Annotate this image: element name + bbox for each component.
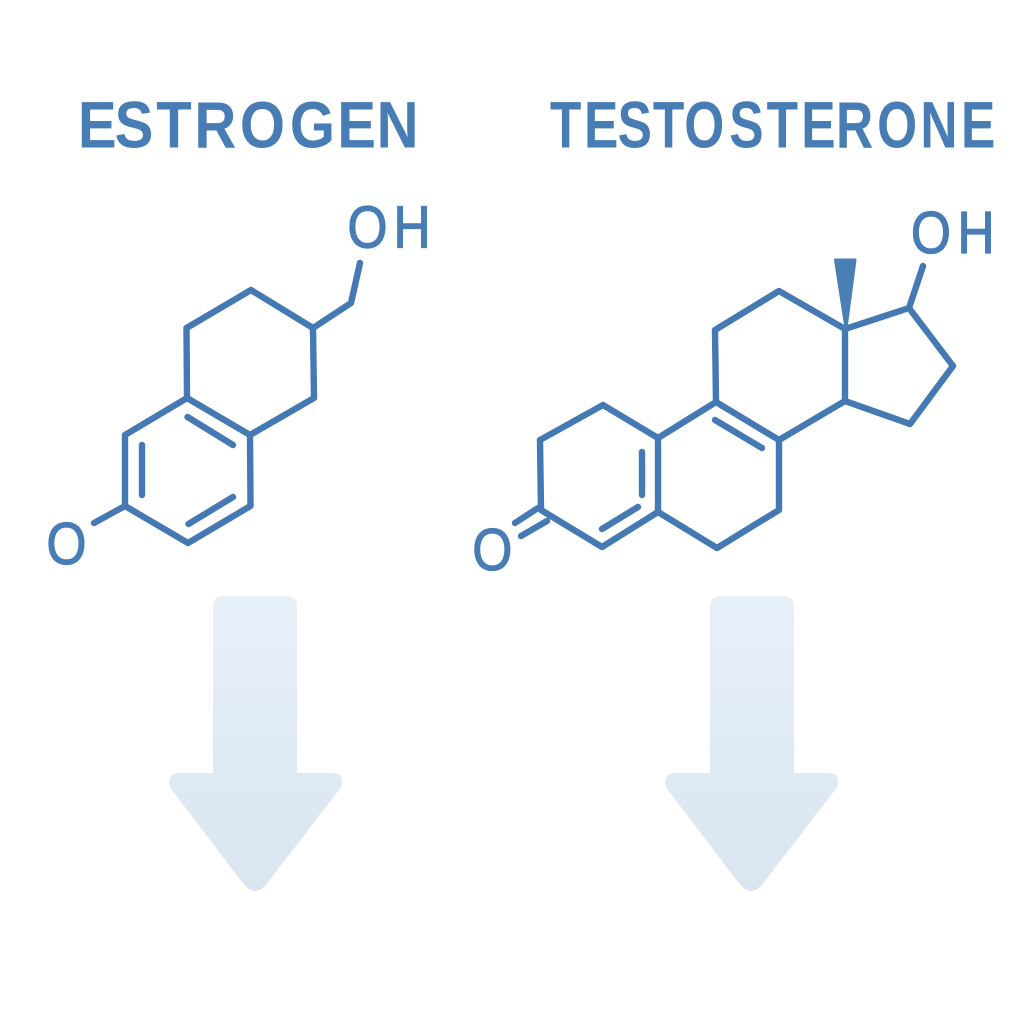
arrow: estrogen down bbox=[169, 596, 342, 891]
label: testosterone OH: OH bbox=[911, 200, 995, 266]
label: estrogen OH: OH bbox=[347, 194, 431, 260]
label: estrogen O: O bbox=[46, 511, 86, 577]
arrow: testosterone down bbox=[665, 596, 838, 891]
title: estrogen: ESTROGEN bbox=[78, 89, 419, 162]
label: testosterone O: O bbox=[472, 517, 512, 583]
wedge bond bbox=[836, 260, 855, 328]
molecule: testosterone bbox=[515, 266, 953, 548]
molecule: estrogen bbox=[94, 263, 360, 543]
title: testosterone: TESTOSTERONE bbox=[550, 87, 995, 162]
